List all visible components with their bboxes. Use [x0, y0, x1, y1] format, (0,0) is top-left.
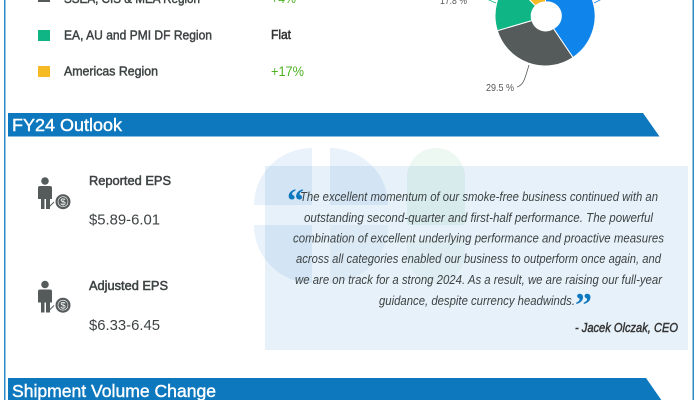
label: Reported EPS — [89, 173, 171, 188]
quote text: The excellent momentum of our smoke-free business continued with an — [300, 189, 658, 204]
quote text: outstanding second-quarter and first-half performance. The powerful — [304, 210, 654, 225]
slice: dark 29.5% — [497, 20, 573, 66]
heading banner: FY24 Outlook: FY24 Outlook — [12, 115, 122, 135]
icon: closing quote mark: ” — [575, 287, 592, 324]
legend row: EA, AU and PMI DF: Flat — [271, 28, 291, 42]
quote text — [293, 189, 664, 308]
quote text: guidance, despite currency headwinds. — [379, 293, 575, 308]
icon: person with dollar coin: $ — [60, 301, 66, 312]
slice: yellow 12.1% — [510, 0, 546, 6]
heading banner: FY24 Outlook — [8, 113, 660, 136]
legend row: Americas: Americas Region — [64, 64, 158, 78]
heading banner: Shipment Volume Change — [8, 378, 662, 400]
icon: opening quote mark: “ — [287, 183, 304, 220]
value: $6.33-6.45 — [89, 317, 160, 334]
donut chart: regional share — [440, 0, 655, 94]
slice: green 17.8% — [495, 0, 536, 31]
attribution: - Jacek Olczak, CEO — [575, 320, 678, 335]
metric: Reported EPS — [38, 173, 171, 228]
label: Adjusted EPS — [89, 278, 168, 293]
legend row: SSEA, CIS & MEA — [38, 0, 296, 6]
legend row: Americas: +17% — [271, 64, 304, 79]
decorative background shapes — [254, 148, 465, 283]
icon: person with dollar coin: $ — [60, 197, 66, 208]
leader lines — [482, 0, 606, 87]
slice: blue 40.6% — [546, 0, 595, 58]
metric: Adjusted EPS — [38, 278, 168, 334]
label: 29.5 %: 29.5 % — [486, 82, 514, 94]
legend: regional change — [38, 0, 304, 79]
legend row: Americas — [38, 64, 304, 79]
value: $5.89-6.01 — [89, 212, 160, 228]
legend row: EA, AU and PMI DF — [38, 28, 291, 42]
legend row: EA, AU and PMI DF: EA, AU and PMI DF Region — [64, 28, 212, 42]
panel: CEO quote — [265, 166, 688, 350]
